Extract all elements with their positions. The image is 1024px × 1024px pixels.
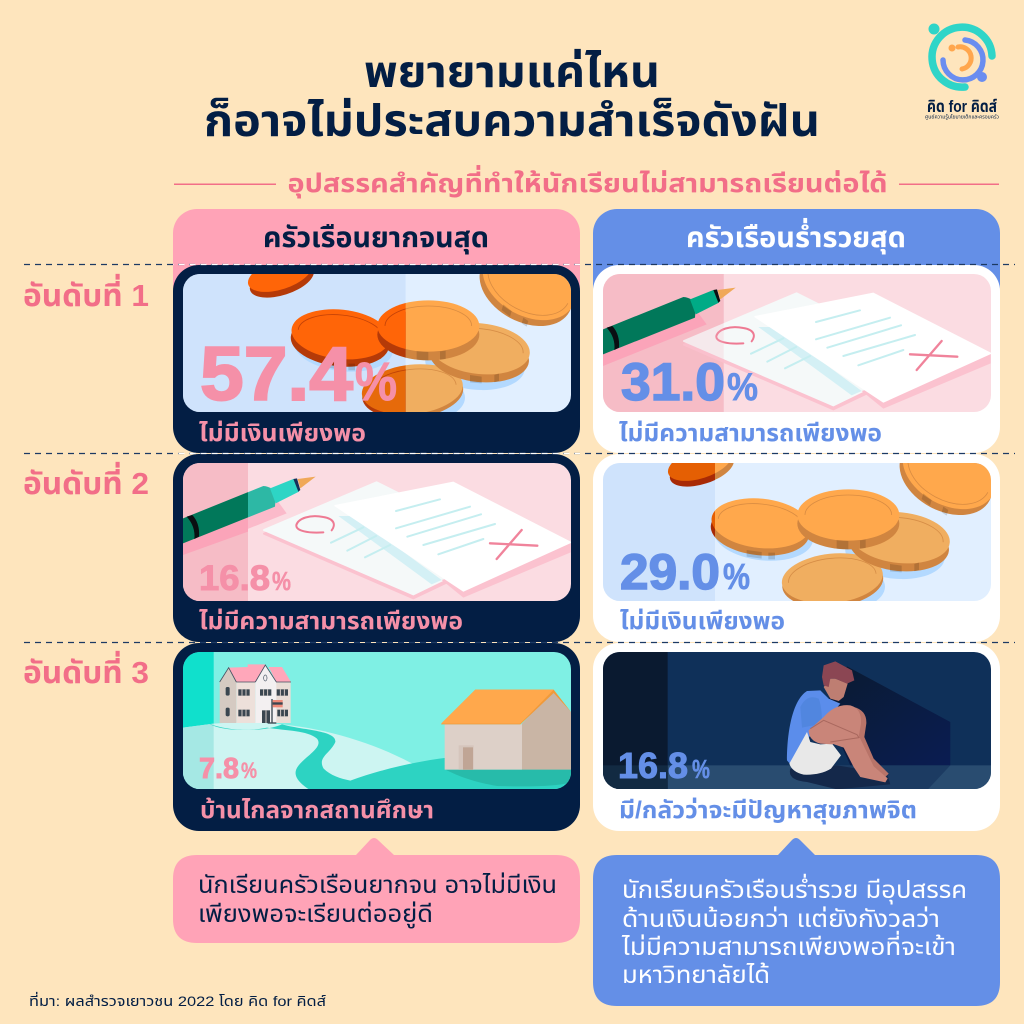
column header: poorest households xyxy=(173,209,580,309)
label: มี/กลัวว่าจะมีปัญหาสุขภาพจิต xyxy=(619,796,917,825)
illustration: school and distant home xyxy=(183,652,571,790)
panel: richest rank 2 xyxy=(593,454,1000,642)
logo: คิด for คิดส์ xyxy=(925,24,999,120)
callout: poorest households xyxy=(173,838,580,943)
value: 16.8 xyxy=(618,745,688,786)
value: % xyxy=(727,366,758,409)
callout: richest households: นักเรียนครัวเรือนร่ำรวย มีอุปสรรค xyxy=(622,873,967,905)
illustration: coins xyxy=(183,274,571,412)
value: 31.0 xyxy=(621,353,725,412)
panel: poorest rank 2 xyxy=(173,454,580,642)
value: 7.8 xyxy=(199,753,239,785)
callout: richest households: ด้านเงินน้อยกว่า แต่ยังกังวลว่า xyxy=(622,905,940,933)
label: บ้านไกลจากสถานศึกษา xyxy=(200,796,434,824)
value: 16.8 xyxy=(199,559,270,598)
value xyxy=(199,753,257,785)
source note: ที่มา: ผลสำรวจเยาวชน 2022 โดย คิด for คิดส์ xyxy=(29,991,326,1009)
callout: richest households: มหาวิทยาลัยได้ xyxy=(622,962,770,989)
value: % xyxy=(272,566,291,596)
callout: richest households: ไม่มีความสามารถเพียงพอที่จะเข้า xyxy=(621,930,956,961)
rank labels xyxy=(23,273,149,690)
callout: poorest households: เพียงพอจะเรียนต่ออยู่ดี xyxy=(198,900,433,929)
label: ไม่มีความสามารถเพียงพอ xyxy=(199,607,463,635)
value: % xyxy=(692,754,710,784)
title: พยายามแค่ไหน xyxy=(364,48,660,97)
label: ไม่มีความสามารถเพียงพอ xyxy=(619,419,882,447)
panel: poorest rank 1 xyxy=(173,265,580,453)
column header: richest households: ครัวเรือนร่ำรวยสุด xyxy=(686,217,906,254)
value: % xyxy=(241,758,257,783)
label: ไม่มีเงินเพียงพอ xyxy=(199,419,366,447)
title: ก็อาจไม่ประสบความสำเร็จดังฝัน xyxy=(204,97,820,146)
title xyxy=(204,48,820,146)
column header: poorest households: ครัวเรือนยากจนสุด xyxy=(263,222,489,254)
logo: คิด for คิดส์: คิด for คิดส์ xyxy=(927,97,997,116)
value: 29.0 xyxy=(620,544,720,600)
subtitle with rules: อุปสรรคสำคัญที่ทำให้นักเรียนไม่สามารถเรียนต่อได้ xyxy=(288,165,888,199)
label: ไม่มีเงินเพียงพอ xyxy=(620,607,785,635)
illustration: anxious person sitting xyxy=(603,652,991,790)
callout: poorest households: นักเรียนครัวเรือนยากจน อาจไม่มีเงิน xyxy=(198,871,557,899)
logo: คิด for คิดส์: ศูนย์ความรู้นโยบายเด็กและครอบครัว xyxy=(925,114,999,120)
panel: richest rank 1 xyxy=(593,265,1000,453)
value: % xyxy=(355,352,397,412)
illustration: coins xyxy=(603,463,991,601)
rank labels: อันดับที่ 3 xyxy=(23,650,149,690)
rank labels: อันดับที่ 1 xyxy=(23,273,149,313)
panel: richest rank 3 xyxy=(593,643,1000,831)
rank labels: อันดับที่ 2 xyxy=(23,461,149,501)
illustration: exam papers and pen xyxy=(603,274,991,412)
illustration: exam papers and pen xyxy=(183,463,571,601)
value: % xyxy=(723,556,750,597)
value: 57.4 xyxy=(200,332,353,417)
panel: poorest rank 3 xyxy=(173,643,580,831)
column header: richest households xyxy=(593,209,1000,309)
callout: richest households xyxy=(593,838,1000,1006)
